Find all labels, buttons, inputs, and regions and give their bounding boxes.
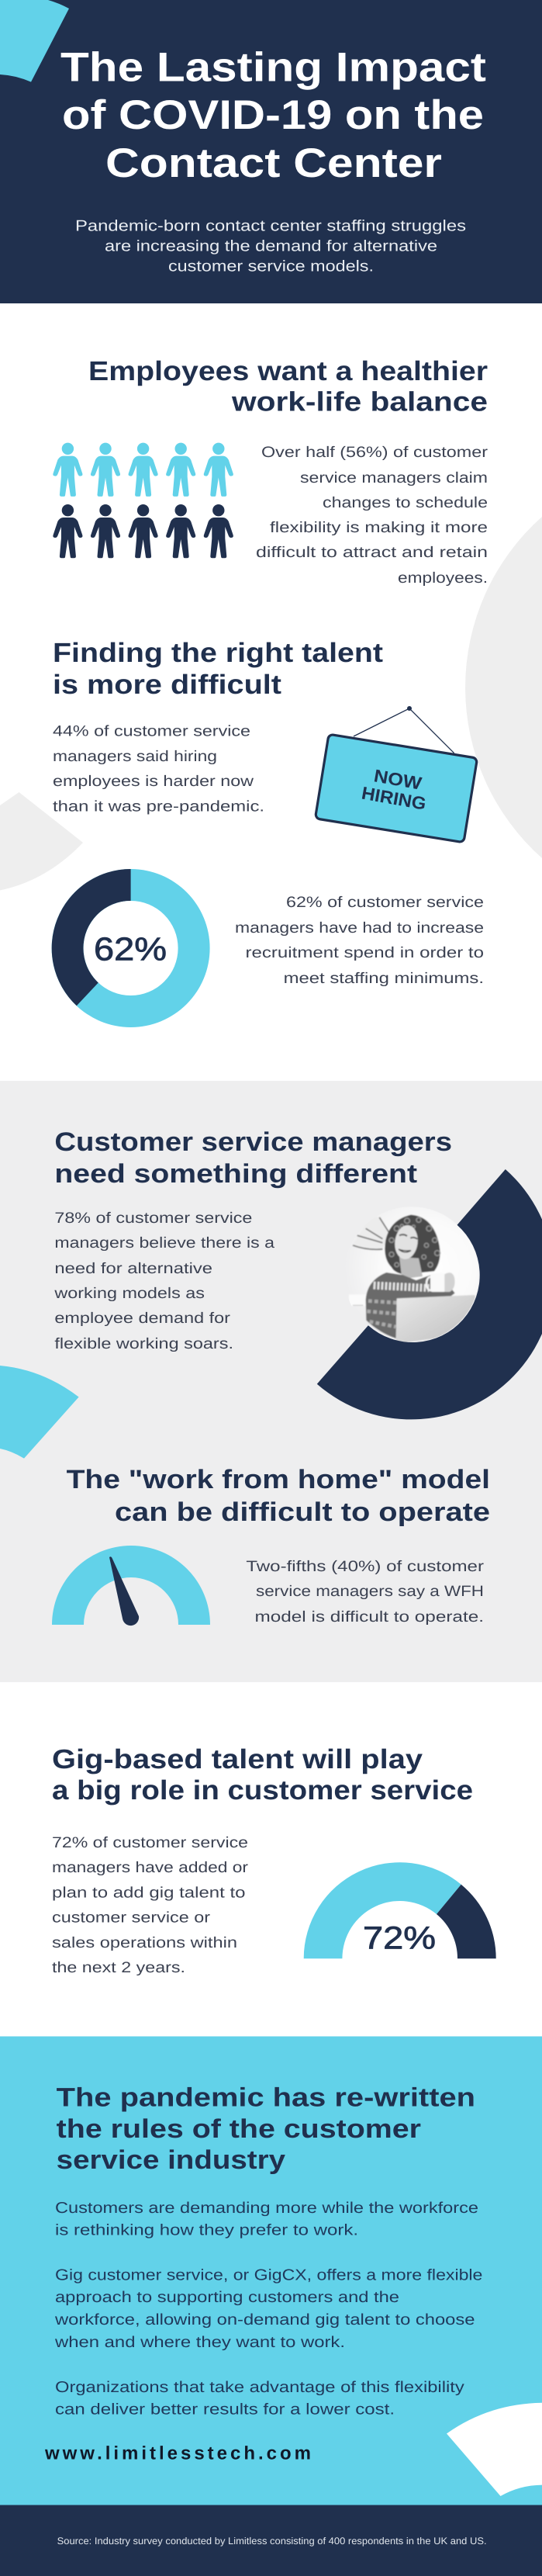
decorative cyan wedge left bbox=[0, 1366, 79, 1459]
text: 72 percent: customer service or bbox=[52, 1909, 211, 1927]
subtitle: customer service models. bbox=[168, 258, 374, 275]
text: conclusion paragraphs: Customers are demanding more while the workforce bbox=[55, 2200, 478, 2217]
heading: work from home: can be difficult to operate bbox=[115, 1497, 490, 1527]
heading: finding talent bbox=[53, 638, 383, 700]
heading: pandemic re-written: service industry bbox=[57, 2145, 285, 2175]
text: 44 percent: employees is harder now bbox=[53, 773, 254, 790]
text: website url: www.limitlesstech.com bbox=[44, 2443, 311, 2464]
panel: grey section bbox=[0, 1081, 542, 1682]
text: 78 percent: working models as bbox=[54, 1285, 205, 1302]
heading: finding talent: is more difficult bbox=[53, 670, 281, 700]
icon: people grid bbox=[53, 443, 233, 558]
heading: pandemic re-written: the rules of the customer bbox=[57, 2114, 421, 2144]
text: conclusion paragraphs: approach to supporting customers and the bbox=[55, 2289, 399, 2306]
text: two-fifths 40 percent bbox=[246, 1558, 485, 1626]
text: 44 percent: 44% of customer service bbox=[53, 723, 250, 740]
panel: work-life balance bbox=[53, 356, 488, 587]
text: 72 percent: plan to add gig talent to bbox=[52, 1885, 246, 1902]
decorative cyan wedge bbox=[0, 0, 69, 82]
heading: work from home bbox=[67, 1465, 490, 1527]
text: over half 56%: difficult to attract and retain bbox=[256, 544, 488, 561]
heading: work-life balance: work-life balance bbox=[231, 387, 488, 417]
icon: now hiring sign bbox=[315, 706, 478, 843]
text: 44 percent bbox=[53, 723, 264, 815]
heading: something different bbox=[54, 1127, 452, 1189]
text: 78 percent bbox=[54, 1210, 274, 1352]
text: conclusion paragraphs: can deliver better results for a lower cost. bbox=[55, 2401, 395, 2418]
text: conclusion paragraphs: when and where they want to work. bbox=[54, 2334, 345, 2351]
text: over half 56%: employees. bbox=[398, 570, 488, 587]
text: 78 percent: 78% of customer service bbox=[54, 1210, 252, 1227]
text: 62 percent: managers have had to increase bbox=[235, 919, 484, 937]
chart: half gauge 72 percent: 72% bbox=[363, 1920, 436, 1956]
chart: donut 62 percent bbox=[52, 869, 210, 1027]
panel: conclusion bbox=[0, 2036, 542, 2505]
text: over half 56%: service managers claim bbox=[300, 469, 488, 486]
text: two-fifths 40 percent: Two-fifths (40%) of customer bbox=[246, 1558, 485, 1575]
text: 44 percent: managers said hiring bbox=[53, 748, 217, 765]
panel: footer bbox=[0, 2505, 542, 2576]
text: conclusion paragraphs: workforce, allowing on-demand gig talent to choose bbox=[54, 2311, 475, 2328]
decorative grey wedge left bbox=[0, 792, 83, 891]
heading: something different: need something different bbox=[54, 1159, 417, 1189]
title: of COVID-19 on the bbox=[62, 92, 484, 138]
text: 78 percent: employee demand for bbox=[54, 1310, 231, 1327]
decorative grey circle right bbox=[465, 517, 542, 858]
chart: gauge with needle bbox=[52, 1546, 210, 1626]
text: 78 percent: managers believe there is a bbox=[54, 1234, 274, 1252]
text: 72 percent: 72% of customer service bbox=[52, 1834, 248, 1851]
heading: pandemic re-written bbox=[57, 2083, 475, 2175]
text: conclusion paragraphs: is rethinking how they prefer to work. bbox=[55, 2222, 358, 2239]
heading: finding talent: Finding the right talent bbox=[53, 638, 383, 668]
text: 72 percent: sales operations within bbox=[52, 1934, 237, 1951]
text: 72 percent bbox=[52, 1834, 249, 1976]
heading: gig talent: Gig-based talent will play bbox=[52, 1744, 423, 1774]
subtitle: Pandemic-born contact center staffing struggles bbox=[75, 217, 466, 234]
text: conclusion paragraphs: Gig customer service, or GigCX, offers a more flexible bbox=[55, 2267, 482, 2284]
text: over half 56%: flexibility is making it more bbox=[270, 519, 488, 536]
decorative navy arc ring bbox=[317, 1169, 542, 1419]
text: over half 56% bbox=[256, 444, 488, 587]
text: 72 percent: the next 2 years. bbox=[52, 1959, 185, 1976]
text: conclusion paragraphs bbox=[54, 2200, 482, 2418]
text: 78 percent: flexible working soars. bbox=[54, 1335, 233, 1352]
text: 62 percent bbox=[235, 894, 484, 987]
heading: something different: Customer service managers bbox=[54, 1127, 452, 1157]
subtitle bbox=[75, 217, 466, 275]
heading: gig talent: a big role in customer service bbox=[52, 1775, 473, 1806]
subtitle: are increasing the demand for alternative bbox=[105, 237, 437, 254]
text: over half 56%: changes to schedule bbox=[323, 494, 488, 511]
panel: gig talent bbox=[52, 1744, 496, 1976]
heading: gig talent bbox=[52, 1744, 473, 1806]
chart: half gauge 72 percent bbox=[304, 1862, 496, 1958]
text: two-fifths 40 percent: service managers say a WFH bbox=[256, 1583, 484, 1600]
text: two-fifths 40 percent: model is difficult to operate. bbox=[254, 1608, 484, 1626]
text: 62 percent: 62% of customer service bbox=[286, 894, 484, 911]
heading: work from home: The "work from home" model bbox=[67, 1465, 490, 1494]
text: over half 56%: Over half (56%) of customer bbox=[261, 444, 488, 461]
heading: work-life balance bbox=[88, 356, 488, 417]
text: 62 percent: meet staffing minimums. bbox=[284, 970, 484, 987]
title: Contact Center bbox=[105, 140, 442, 186]
title bbox=[60, 45, 486, 186]
heading: work-life balance: Employees want a healthier bbox=[88, 356, 488, 386]
icon: now hiring sign: HIRING bbox=[360, 783, 428, 814]
text: 44 percent: than it was pre-pandemic. bbox=[53, 798, 264, 815]
photo: woman with laptop bbox=[343, 1207, 479, 1344]
text: 78 percent: need for alternative bbox=[54, 1260, 212, 1277]
panel: finding talent bbox=[52, 638, 484, 1027]
icon: now hiring sign: NOW bbox=[372, 765, 423, 794]
text: source note: Source: Industry survey conducted by Limitless consisting of 400 respondents in the UK and US. bbox=[57, 2536, 487, 2547]
panel: header bbox=[0, 0, 542, 303]
decorative white wedge bbox=[447, 2403, 542, 2496]
heading: pandemic re-written: The pandemic has re-written bbox=[57, 2083, 475, 2113]
chart: donut 62 percent: 62% bbox=[94, 930, 167, 967]
text: conclusion paragraphs: Organizations that take advantage of this flexibility bbox=[55, 2379, 464, 2396]
title: The Lasting Impact bbox=[60, 45, 486, 91]
text: 62 percent: recruitment spend in order to bbox=[245, 944, 484, 961]
text: 72 percent: managers have added or bbox=[52, 1859, 249, 1876]
